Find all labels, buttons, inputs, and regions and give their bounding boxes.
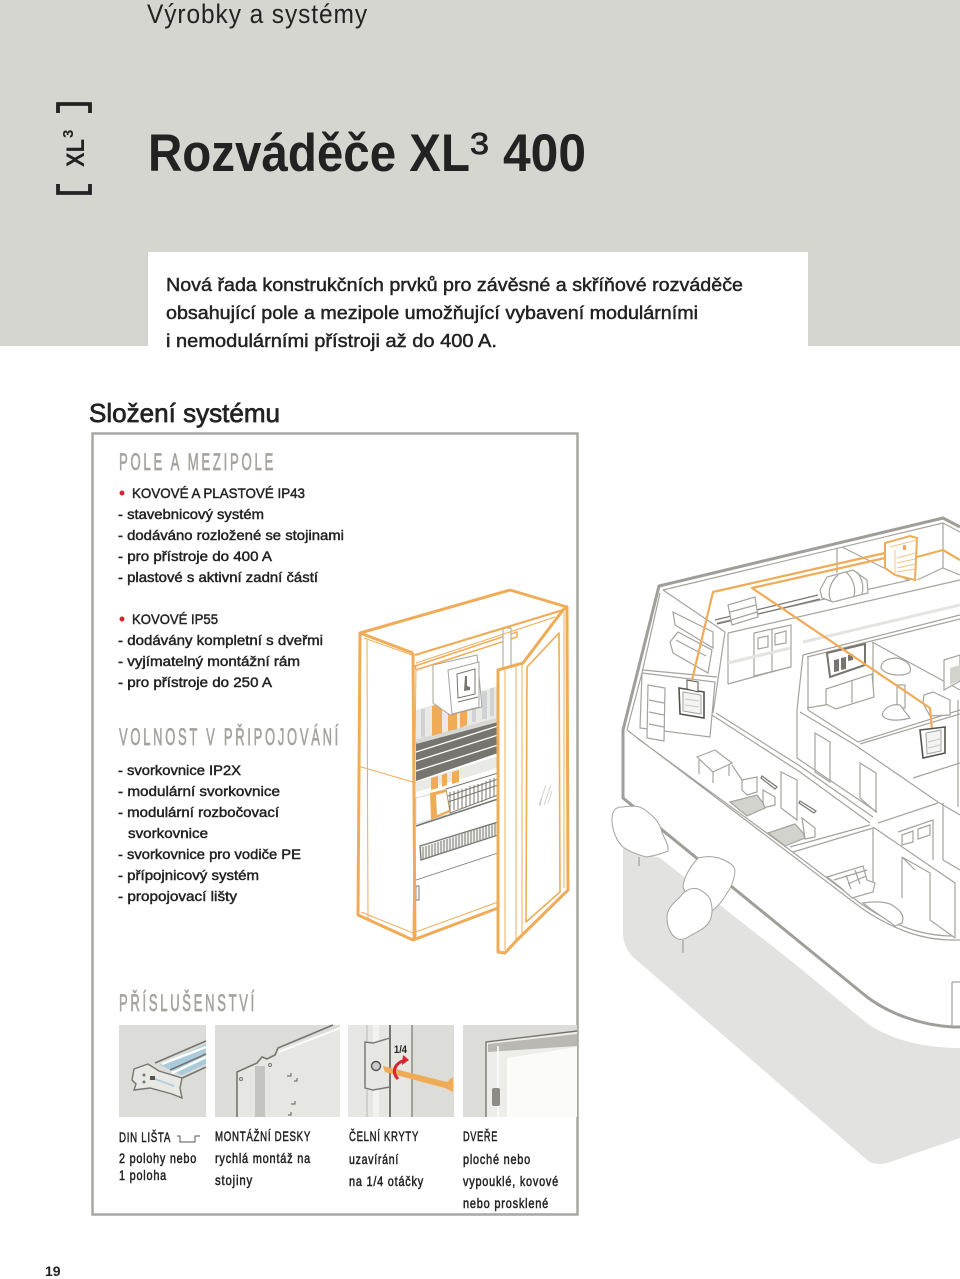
accessory: mounting plate [215,1025,340,1117]
caption: doors: DVEŘE [463,1128,498,1144]
sub-distribution cabinet right [920,727,945,758]
accessory: front cover quarter turn: 1/4 [394,1044,408,1056]
list: connection: - přípojnicový systém [118,867,259,883]
interior walls [627,523,960,940]
side tag: XL3 [58,104,90,193]
rail [415,632,517,670]
main distribution cabinet [885,536,917,580]
caption: doors: vypouklé, kovové [463,1173,559,1189]
caption: doors [463,1128,559,1211]
door [498,607,568,953]
list: connection [118,762,301,904]
stripes lower [416,756,498,792]
caption: mounting plates: stojiny [215,1172,253,1188]
list: connection: - svorkovnice IP2X [118,762,242,778]
bathroom fixtures [826,644,960,720]
list: IP43: KOVOVÉ A PLASTOVÉ IP43 [132,485,305,501]
caption: DIN rail: DIN LIŠTA [119,1129,171,1145]
page number: 19 [45,1263,61,1279]
modular terminals [446,773,498,813]
intro box: Nová řada konstrukčních prvků pro závěsné a skříňové rozváděče [166,275,743,295]
main title: Rozváděče XL [148,124,470,183]
caption: DIN rail: 2 polohy nebo [119,1150,197,1166]
list: IP55: KOVOVÉ IP55 [132,611,218,627]
ground shadow [623,847,960,1164]
intro box [148,252,808,351]
intro box: obsahující pole a mezipole umožňující vybavení modulárními [166,303,698,323]
caption: DIN rail [119,1129,200,1183]
building illustration [612,518,960,1164]
accessory: doors [463,1025,577,1117]
list: IP43: - stavebnicový systém [118,506,264,522]
orange cable routes [692,550,960,730]
accessory: front cover quarter turn [348,1025,454,1117]
list: IP43: - pro přístroje do 400 A [118,548,273,564]
main title: 3 [470,126,489,161]
outer wall [623,518,960,1027]
list: IP43: - plastové s aktivní zadní částí [118,569,318,585]
accessory captions [119,1128,559,1211]
bus bars [416,718,498,781]
heading: volnost v připojování: VOLNOST V PŘIPOJOVÁNÍ [119,724,341,751]
list: connection: - propojovací lišty [118,888,237,904]
list: IP55 [118,611,323,690]
cabinet illustration [358,590,568,953]
caption: doors: nebo prosklené [463,1195,549,1211]
list: connection: - modulární rozbočovací [118,804,279,820]
caption: front covers: ČELNÍ KRYTY [349,1128,419,1144]
machine room equipment [670,570,868,673]
shelving and furniture [647,685,903,926]
heading: příslušenství: PŘÍSLUŠENSTVÍ [119,989,257,1017]
building floor [623,518,960,1027]
accessory: DIN rail [119,1025,206,1117]
intro box: i nemodulárními přístroji až do 400 A. [166,331,497,351]
body outline [358,590,567,940]
caption: front covers: uzavírání [349,1151,399,1167]
caption: doors: ploché nebo [463,1151,531,1167]
list: connection: svorkovnice [128,825,208,841]
header band [0,0,960,346]
list: connection: - svorkovnice pro vodiče PE [118,846,301,862]
side tag: XL3: XL [62,139,90,167]
panel: system composition [92,434,578,1214]
caption: DIN rail: 1 poloha [119,1167,167,1183]
side tag: XL3: 3 [60,130,77,138]
list: IP55: - dodávány kompletní s dveřmi [118,632,323,648]
list: IP55: - pro přístroje do 250 A [118,674,273,690]
list: IP43 [118,485,344,585]
caption: front covers [349,1128,424,1189]
caption: front covers: na 1/4 otáčky [349,1173,424,1189]
breaker [433,655,482,715]
list: connection: - modulární svorkovnice [118,783,280,799]
caption: mounting plates [215,1128,311,1188]
list: IP55: - vyjímatelný montážní rám [118,653,300,669]
caption: mounting plates: rychlá montáž na [215,1150,311,1166]
trees [612,806,735,953]
main title: 400 [503,124,586,183]
list: IP43: - dodáváno rozložené se stojinami [118,527,344,543]
heading: pole a mezipole: POLE A MEZIPOLE [119,449,276,476]
sub-distribution cabinet left [679,680,704,718]
caption: mounting plates: MONTÁŽNÍ DESKY [215,1128,311,1144]
section heading: Složení systému [89,398,280,428]
stripes upper [416,686,498,740]
